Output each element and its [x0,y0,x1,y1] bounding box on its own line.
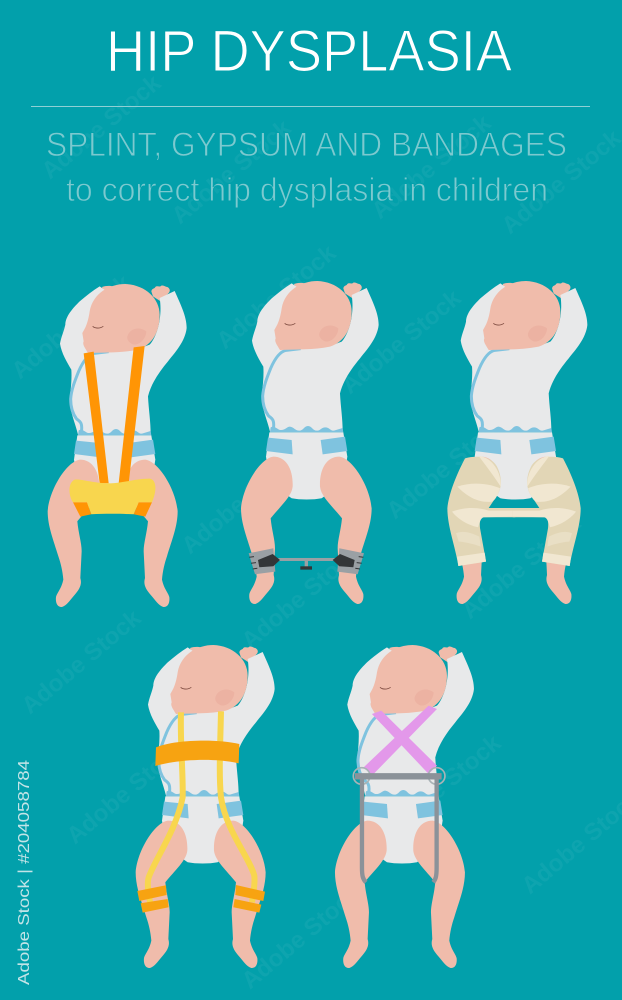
header divider [31,106,590,107]
knee bands [137,885,265,913]
baby 5: metal frame brace [335,645,474,968]
baby 1: harness [48,284,187,607]
metal frame [353,768,445,882]
stock watermarks: Adobe Stock [237,879,367,995]
stock watermarks: Adobe Stock [237,539,367,655]
yellow straps [148,711,255,902]
stock watermarks: Adobe Stock [382,409,512,525]
legs [448,457,580,604]
legs [335,821,465,968]
stock watermarks: Adobe Stock [7,269,137,385]
ankle splint [249,548,364,574]
stock watermarks: Adobe Stock [37,69,167,185]
stock watermarks: Adobe Stock [337,284,467,400]
stock watermarks: Adobe Stock [212,239,342,355]
subtitle line 2: to correct hip dysplasia in children [66,171,548,208]
legs [136,821,266,968]
stock watermarks: Adobe Stock [17,604,147,720]
baby 2: ankle splint [241,281,379,604]
harness pad [69,479,155,517]
stock watermarks: Adobe Stock [177,444,307,560]
harness straps [84,346,145,483]
baby 3: plaster cast [447,281,587,604]
stock watermarks: Adobe Stock [367,109,497,225]
legs [48,460,178,607]
stock watermarks: Adobe Stock [62,734,192,850]
subtitle line 1: SPLINT, GYPSUM AND BANDAGES [46,126,567,164]
legs [241,457,372,604]
belt [155,741,239,766]
stock watermarks: Adobe Stock [377,729,507,845]
baby 4: bandage belt and leg straps [136,645,275,968]
pink cross straps [364,706,437,776]
title: HIP DYSPLASIA [106,19,512,84]
stock id: Adobe Stock | #204058784 [16,760,33,985]
cast [447,456,581,566]
stock watermarks: Adobe Stock [457,509,587,625]
stock watermarks: Adobe Stock [167,114,297,230]
